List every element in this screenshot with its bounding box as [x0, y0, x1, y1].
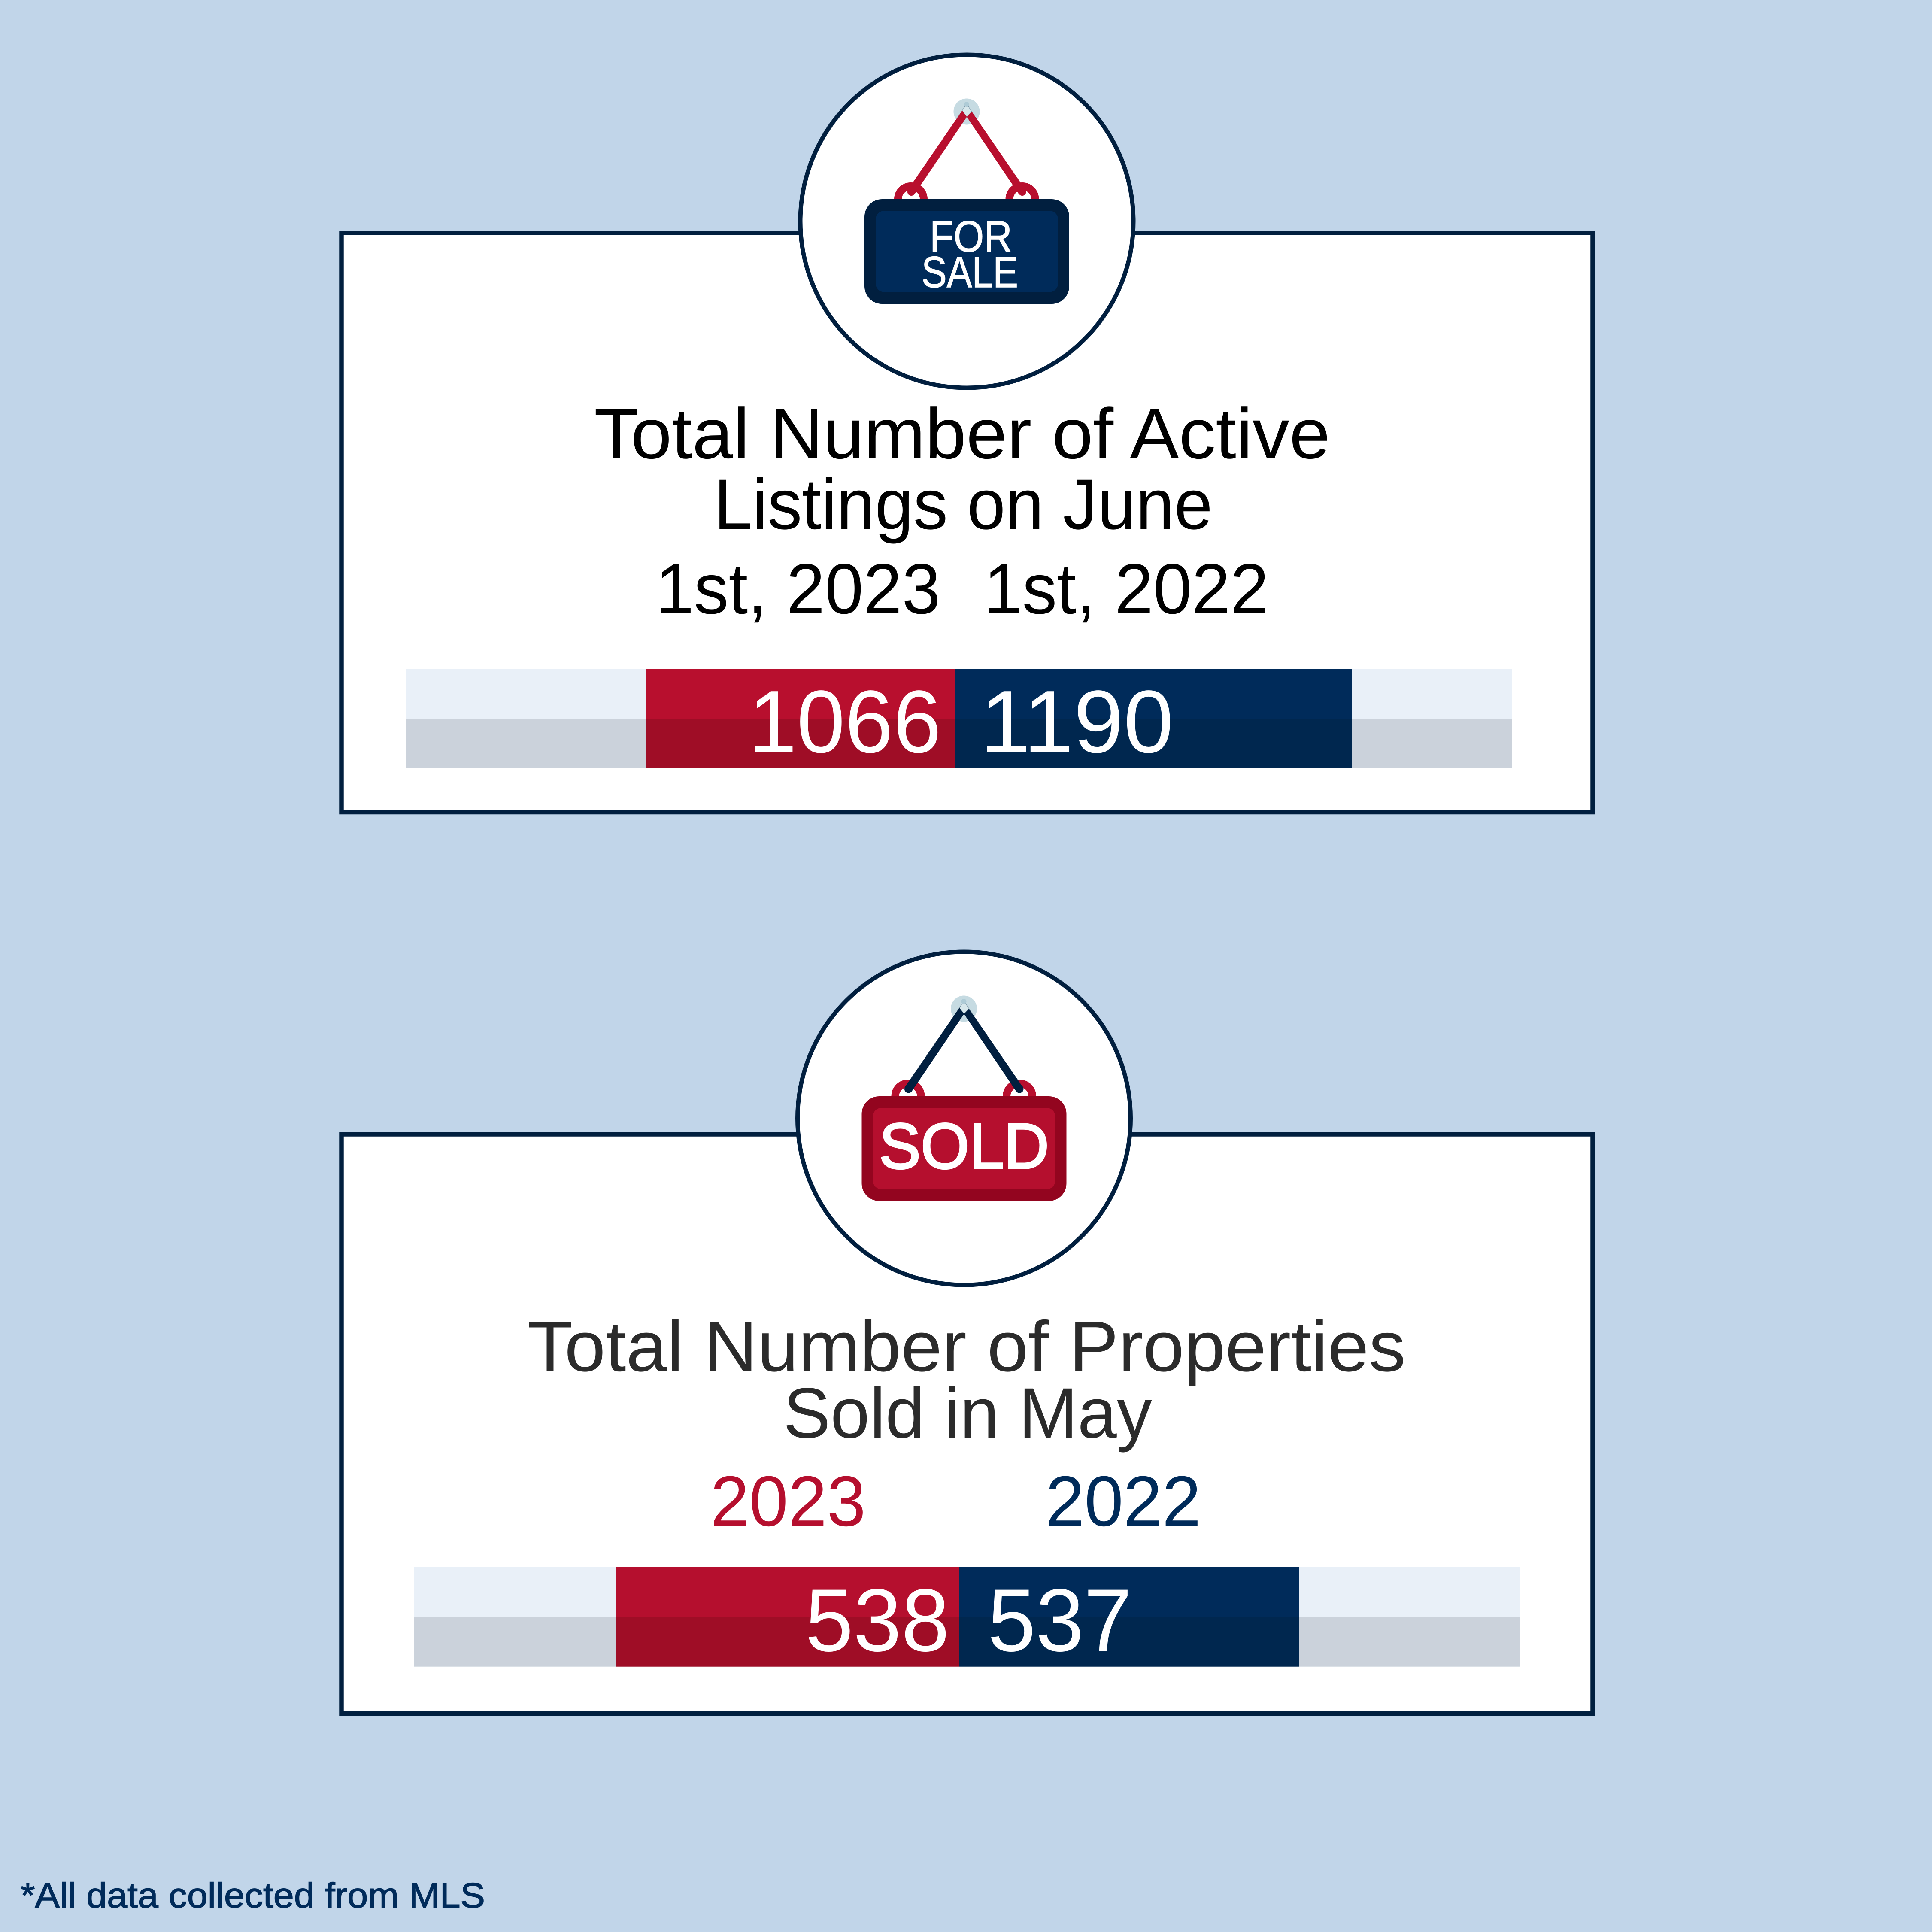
bar: 2022	[955, 669, 1352, 768]
bar: 2022	[959, 1567, 1299, 1667]
panel box: active listings	[342, 233, 1592, 812]
heading: properties sold: Total Number of Properties	[528, 1307, 1406, 1386]
hanging rings	[895, 1083, 1032, 1099]
sign text: for sale: FOR	[930, 212, 1012, 261]
bar chart: properties sold	[414, 1567, 1520, 1670]
sign text: for sale	[922, 212, 1018, 297]
wall hook	[954, 99, 980, 124]
panel: properties sold	[342, 952, 1592, 1714]
column label: 1st, 2022: 1st, 2022	[984, 549, 1269, 629]
hanging ropes	[907, 111, 1026, 196]
wall hook	[951, 996, 977, 1022]
bar: 2023	[646, 669, 955, 768]
panel box: properties sold	[342, 1134, 1592, 1714]
hanging ropes	[904, 1008, 1023, 1093]
value: 537: 537	[988, 1571, 1132, 1670]
hanging rings	[898, 186, 1035, 202]
sign board	[862, 1096, 1066, 1201]
icon: sold sign in circle	[798, 952, 1131, 1285]
footnote: *All data collected from MLS	[21, 1876, 485, 1915]
heading: active listings	[594, 394, 1330, 544]
heading: properties sold	[528, 1307, 1406, 1453]
icon: for sale sign in circle	[800, 55, 1133, 388]
value: 1190: 1190	[980, 672, 1174, 771]
heading: active listings: Total Number of Active	[594, 394, 1330, 474]
bar track	[406, 669, 1512, 768]
icon circle	[798, 952, 1131, 1285]
sign face	[876, 211, 1058, 292]
panel: active listings	[342, 55, 1592, 812]
column label: 1st, 2023: 1st, 2023	[655, 549, 940, 629]
sign text: for sale: SALE	[922, 248, 1018, 297]
sign board	[864, 199, 1069, 304]
column label: 2022: 2022	[1046, 1462, 1201, 1541]
bar: 2023	[616, 1567, 959, 1667]
value: 538: 538	[805, 1571, 949, 1670]
sign text: sold: SOLD	[879, 1110, 1049, 1182]
column label: 2023: 2023	[710, 1462, 866, 1541]
icon circle	[800, 55, 1133, 388]
heading: properties sold: Sold in May	[783, 1374, 1152, 1453]
bar chart: active listings	[406, 669, 1512, 771]
sign face	[873, 1108, 1055, 1189]
heading: active listings: Listings on June	[714, 465, 1213, 544]
value: 1066: 1066	[749, 672, 941, 771]
bar track	[414, 1567, 1520, 1667]
